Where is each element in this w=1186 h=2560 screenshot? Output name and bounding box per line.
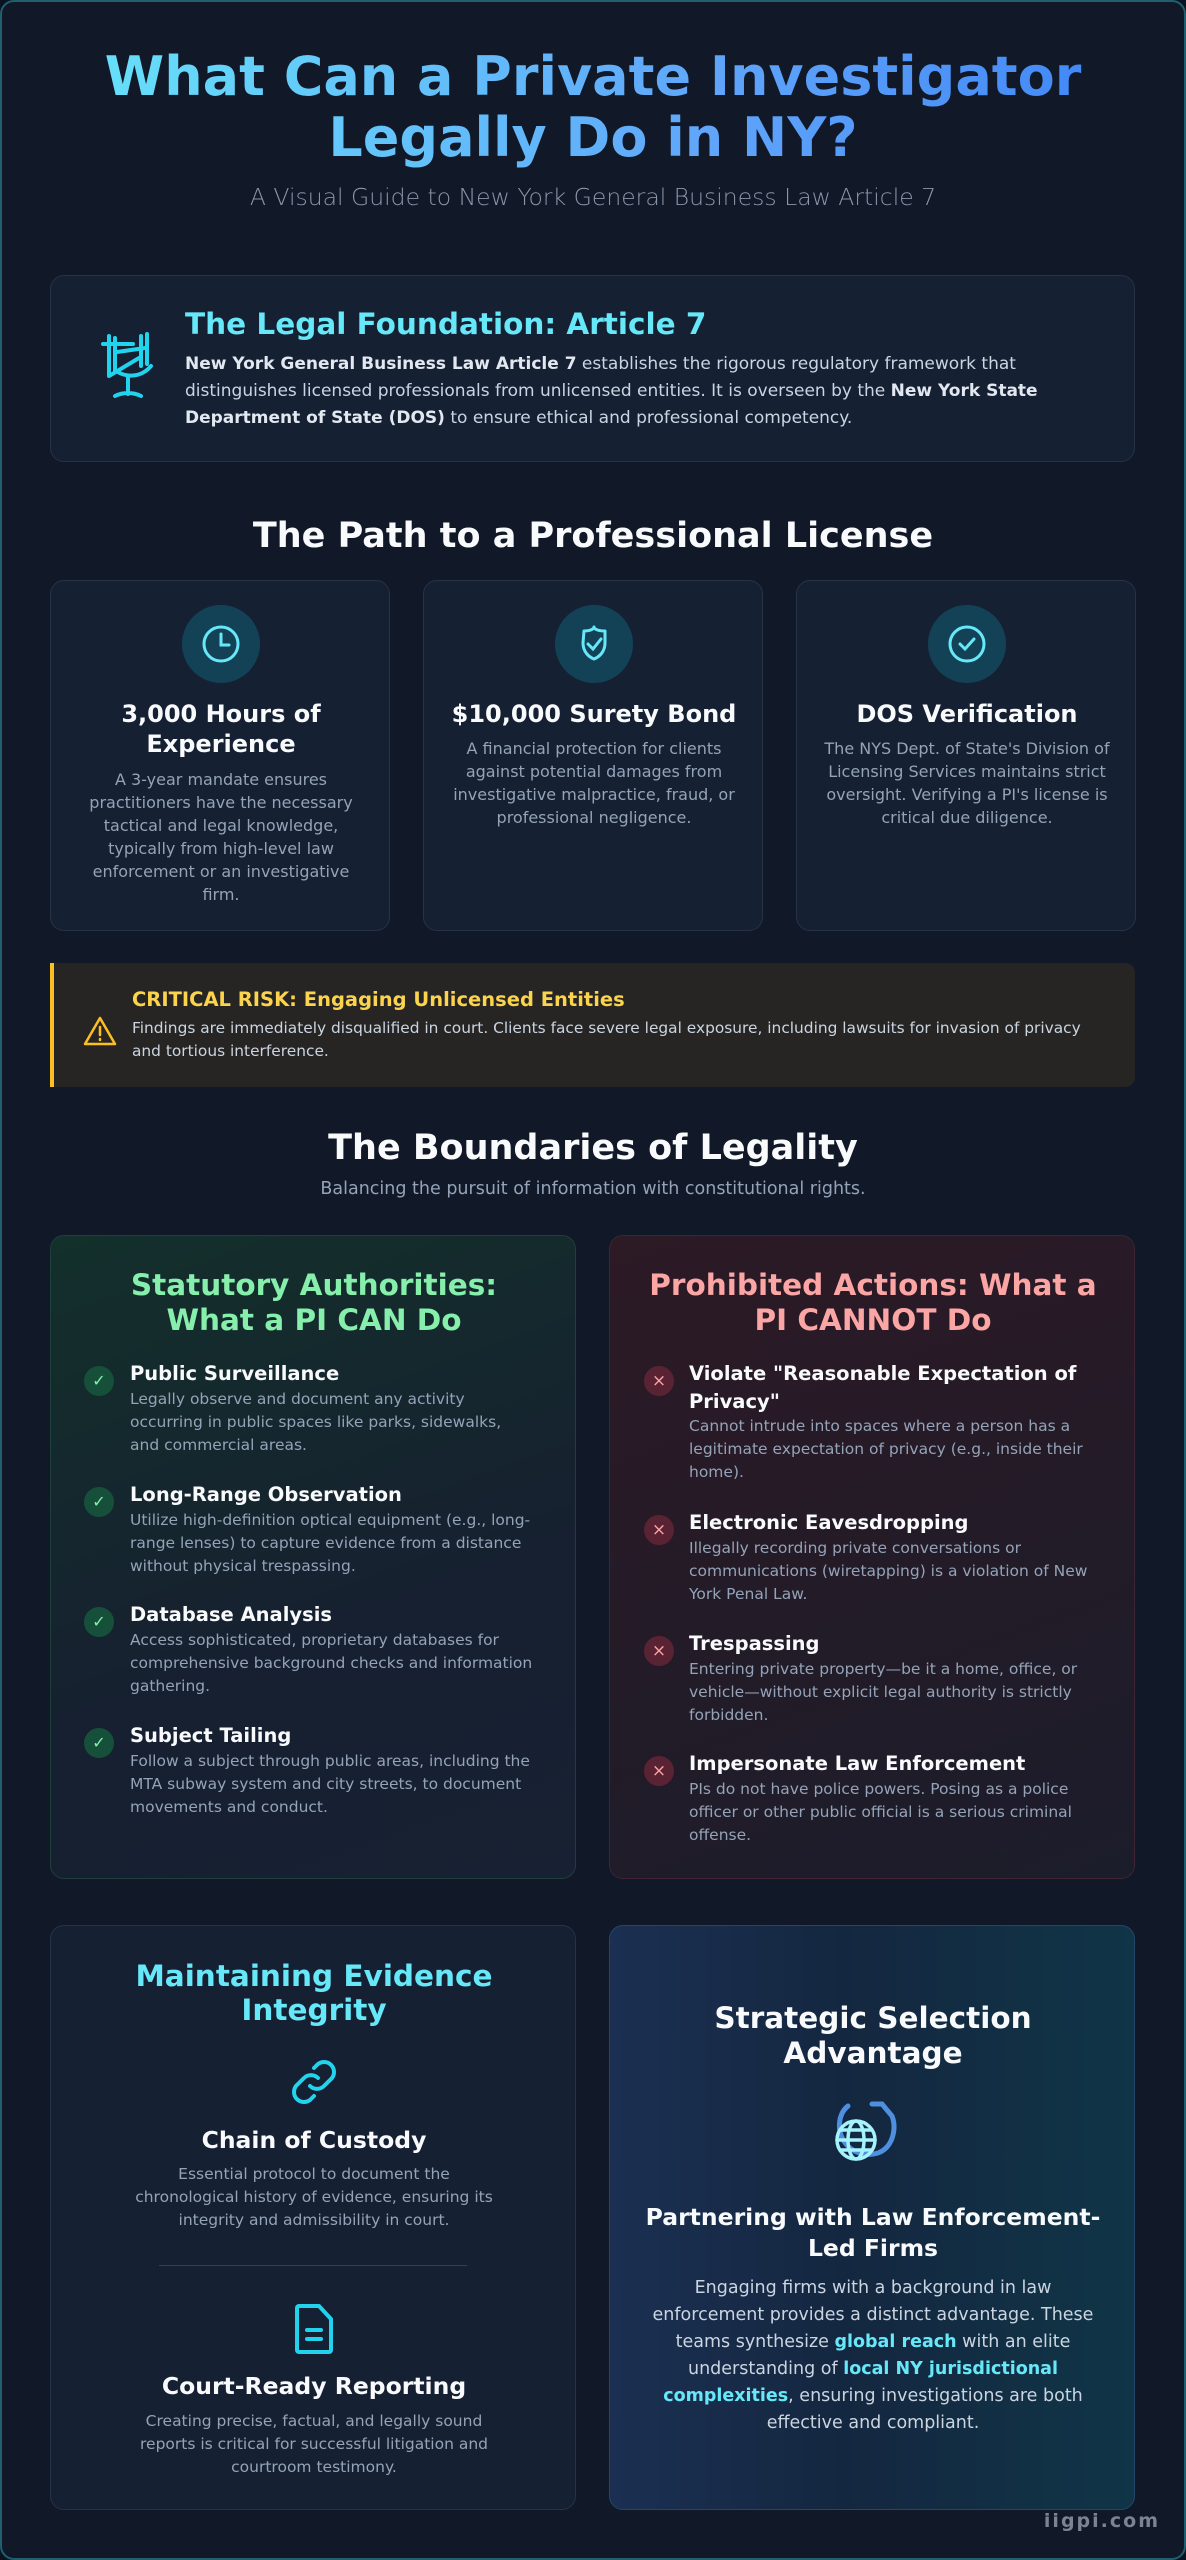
text: Essential protocol to document the chronological history of evidence, ensuring its integrity and admissibility in court.: [135, 2165, 493, 2229]
item: privacy: [644, 1362, 1083, 1481]
title: Legally Do in NY?: [328, 106, 858, 169]
item: long-range observation: Long-Range Observation: [130, 1483, 402, 1506]
panel heading: Strategic Selection: [714, 2001, 1032, 2035]
item: subject tailing: [84, 1724, 530, 1816]
item: eavesdropping: ×: [652, 1520, 666, 1540]
card text: The NYS Dept. of State's Division of Licensing Services maintains strict oversight. Verifying a PI's license is critical due diligence.: [824, 739, 1110, 827]
item: public surveillance: ✓: [92, 1371, 106, 1390]
item: impersonate: ×: [652, 1761, 666, 1781]
item: trespassing: Trespassing: [689, 1632, 819, 1655]
callout text: Findings are immediately disqualified in court. Clients face severe legal exposure, including lawsuits for invasion of privacy and tortious interference.: [132, 1019, 1081, 1060]
panel heading: [135, 1959, 493, 2027]
panel: strategic selection: [609, 1925, 1135, 2510]
card title: 3,000 Hours of: [121, 700, 321, 728]
panel heading: Advantage: [783, 2036, 963, 2070]
icon: check circle: [928, 605, 1006, 683]
title: [0, 46, 1186, 168]
item: trespassing: [644, 1632, 1078, 1724]
callout: critical risk: [50, 963, 1135, 1087]
item: public surveillance: Public Surveillance: [130, 1362, 339, 1385]
subtitle: A Visual Guide to New York General Business Law Article 7: [250, 183, 936, 211]
subheading: [646, 2203, 1100, 2262]
card title: Experience: [146, 730, 296, 758]
icon: warning: [84, 1016, 116, 1046]
item: public surveillance: [84, 1362, 501, 1454]
title: What Can a Private Investigator: [105, 45, 1081, 108]
panel: can do: [50, 1235, 576, 1879]
icon: document: [295, 2304, 333, 2354]
subheading: Led Firms: [808, 2234, 938, 2262]
card: surety bond: [423, 580, 763, 931]
item: database analysis: Database Analysis: [130, 1603, 332, 1626]
panel heading: Statutory Authorities:: [131, 1268, 497, 1302]
item: eavesdropping: Electronic Eavesdropping: [689, 1511, 968, 1534]
item: privacy: ×: [652, 1371, 666, 1391]
panel: evidence integrity: [50, 1925, 576, 2510]
item: long-range observation: [84, 1483, 530, 1575]
item: impersonate: [644, 1752, 1072, 1844]
card: 3000 hours: [50, 580, 390, 931]
item: privacy: Cannot intrude into spaces where a person has a legitimate expectation of privacy (e.g., inside their home).: [689, 1417, 1083, 1481]
panel heading: Integrity: [241, 1993, 387, 2027]
subheading: Balancing the pursuit of information with constitutional rights.: [320, 1179, 866, 1199]
text: Creating precise, factual, and legally sound reports is critical for successful litigation and courtroom testimony.: [140, 2412, 488, 2476]
subheading: court-ready: Court-Ready Reporting: [162, 2372, 466, 2400]
panel heading: Prohibited Actions: What a: [649, 1268, 1097, 1302]
heading: path to license: The Path to a Professional License: [253, 516, 933, 556]
card title: $10,000 Surety Bond: [452, 700, 736, 728]
panel heading: PI CANNOT Do: [755, 1303, 991, 1337]
panel heading: [714, 2001, 1032, 2070]
heading: boundaries: The Boundaries of Legality: [328, 1128, 858, 1168]
card text: A 3-year mandate ensures practitioners have the necessary tactical and legal knowledge, typically from high-level law enforcement or an investigative firm.: [89, 770, 353, 904]
item: impersonate: PIs do not have police powers. Posing as a police officer or other public official is a serious criminal offense.: [689, 1780, 1072, 1844]
icon: globe: [835, 2102, 896, 2161]
icon: clock: [182, 605, 260, 683]
item: database analysis: ✓: [92, 1612, 106, 1631]
item: impersonate: Impersonate Law Enforcement: [689, 1752, 1025, 1775]
panel: legal foundation: [50, 275, 1135, 462]
item: privacy: Violate "Reasonable Expectation of Privacy": [689, 1362, 1076, 1413]
heading: The Legal Foundation: Article 7: [185, 307, 706, 341]
item: trespassing: ×: [652, 1641, 666, 1661]
item: subject tailing: Subject Tailing: [130, 1724, 291, 1747]
subheading: Partnering with Law Enforcement-: [646, 2203, 1100, 2231]
card text: A financial protection for clients against potential damages from investigative malpractice, fraud, or professional negligence.: [453, 739, 735, 827]
panel heading: [131, 1268, 497, 1337]
item: eavesdropping: [644, 1511, 1087, 1603]
icon: chain link: [292, 2060, 336, 2104]
item: subject tailing: ✓: [92, 1733, 106, 1752]
panel heading: What a PI CAN Do: [166, 1303, 462, 1337]
card title: [121, 700, 321, 758]
item: subject tailing: Follow a subject through public areas, including the MTA subway system and city streets, to document movements and conduct.: [130, 1752, 530, 1816]
subheading: chain of custody: Chain of Custody: [202, 2126, 426, 2154]
item: eavesdropping: Illegally recording private conversations or communications (wiretapping) is a violation of New York Penal Law.: [689, 1539, 1087, 1603]
card title: DOS Verification: [856, 700, 1078, 728]
icon: scales: [101, 332, 154, 398]
panel heading: Maintaining Evidence: [135, 1959, 493, 1993]
panel: cannot do: [609, 1235, 1135, 1879]
item: trespassing: Entering private property—be it a home, office, or vehicle—without explicit legal authority is strictly forbidden.: [689, 1660, 1077, 1724]
watermark: iigpi.com: [1044, 2510, 1160, 2532]
item: long-range observation: Utilize high-definition optical equipment (e.g., long-range lenses) to capture evidence from a distance without physical trespassing.: [130, 1511, 530, 1575]
item: database analysis: [84, 1603, 532, 1695]
body text: Engaging firms with a background in law enforcement provides a distinct advantage. These teams synthesize global reach with an elite understanding of local NY jurisdictional complexities, ensuring investigations are both effective and compliant.: [653, 2278, 1093, 2433]
card: DOS verification: [796, 580, 1136, 931]
item: public surveillance: Legally observe and document any activity occurring in public spaces like parks, sidewalks, and commercial areas.: [130, 1390, 501, 1454]
callout heading: CRITICAL RISK: Engaging Unlicensed Entities: [132, 988, 625, 1011]
body text: New York General Business Law Article 7 establishes the rigorous regulatory framework that distinguishes licensed professionals from unlicensed entities. It is overseen by the New York State Department of State (DOS) to ensure ethical and professional competency.: [185, 354, 1038, 428]
item: long-range observation: ✓: [92, 1492, 106, 1511]
icon: shield: [555, 605, 633, 683]
item: database analysis: Access sophisticated, proprietary databases for comprehensive background checks and information gathering.: [130, 1631, 532, 1695]
panel heading: [649, 1268, 1097, 1337]
